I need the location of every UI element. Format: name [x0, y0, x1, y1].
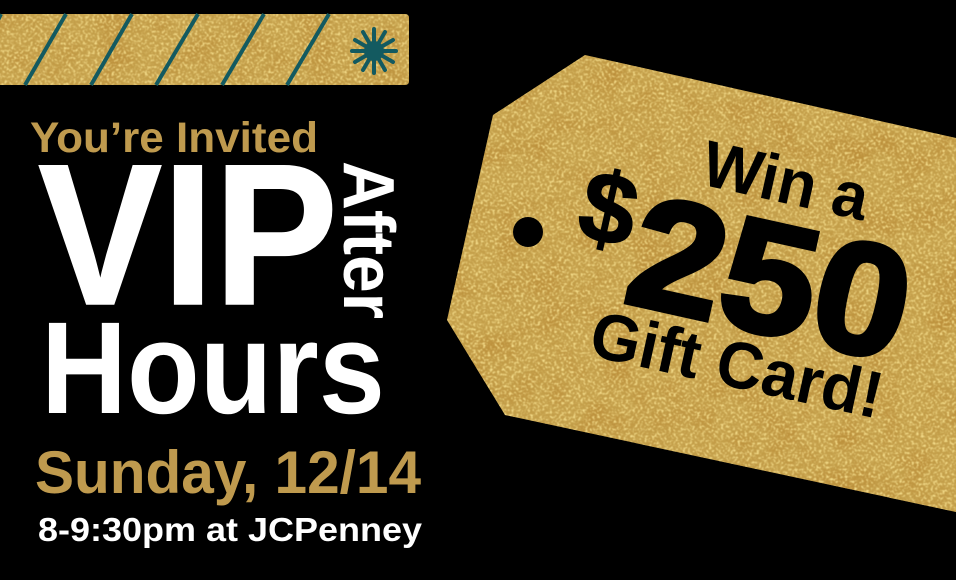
tag text: 250: 250	[614, 162, 927, 395]
time and place: 8-9:30pm at JCPenney	[38, 511, 423, 548]
title: VIP: VIP	[38, 122, 338, 347]
gift tag	[447, 55, 956, 512]
ribbon banner	[0, 14, 409, 85]
ribbon stripes	[0, 14, 329, 85]
title: Hours: Hours	[41, 294, 385, 441]
tag text: dollar sign: $	[569, 148, 648, 270]
icon: starburst	[352, 29, 396, 73]
tag hole	[513, 217, 543, 247]
subheading: You're Invited: You’re Invited	[30, 114, 318, 162]
title: After (rotated): After	[328, 161, 408, 319]
tag text: Gift Card!: Gift Card!	[584, 296, 890, 432]
tag text: Win a: Win a	[696, 126, 877, 234]
date: Sunday, 12/14	[35, 439, 422, 506]
